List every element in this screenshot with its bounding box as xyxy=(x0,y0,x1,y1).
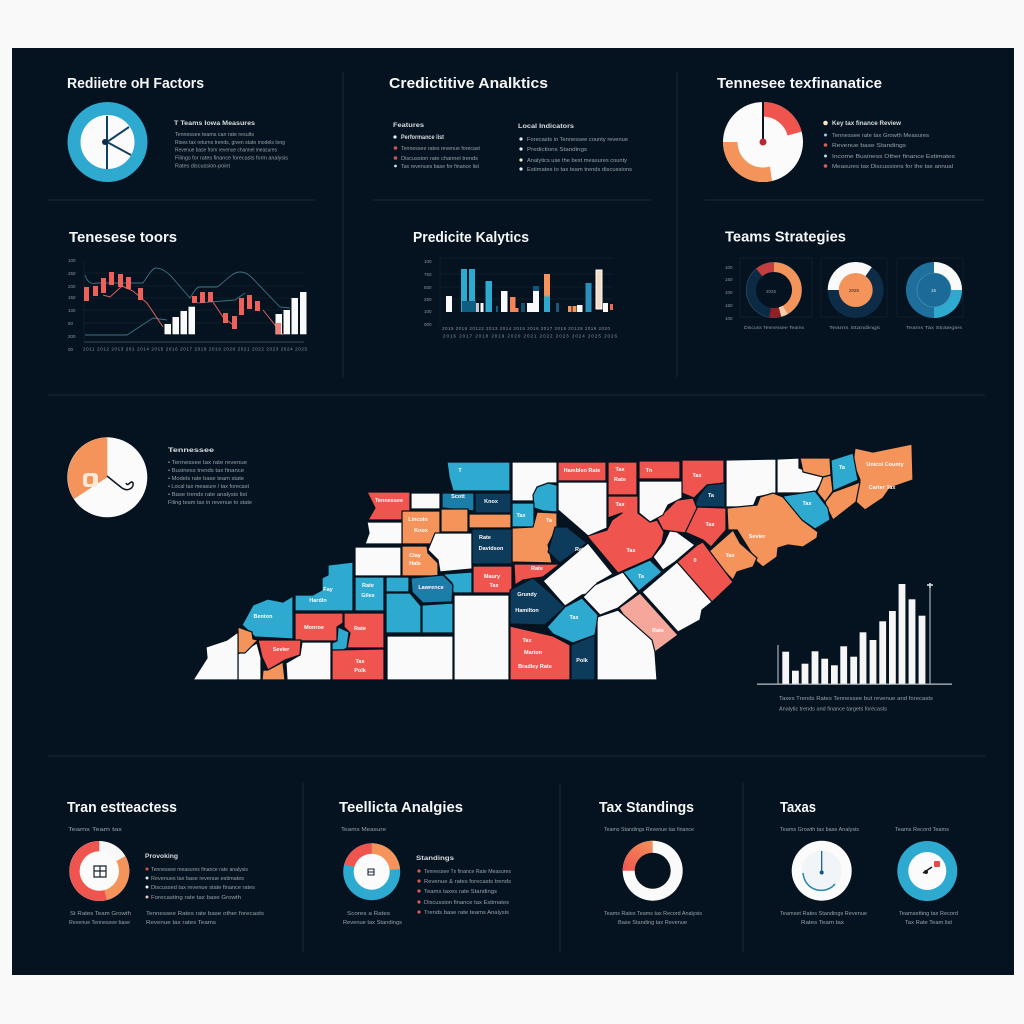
list: effectiveness: Provoking xyxy=(145,854,178,860)
legend: finance: Income Business Other finance Estimates xyxy=(832,154,955,160)
map labels: Benton xyxy=(254,614,273,620)
map labels: Tax xyxy=(725,553,735,559)
map labels: Davidson xyxy=(479,546,504,552)
chart: trend bars xyxy=(757,583,952,712)
map labels: 0 xyxy=(693,558,697,564)
heading: tax standings: Tax Standings xyxy=(599,799,694,816)
text block: summary xyxy=(168,448,252,506)
chart: donut two xyxy=(821,258,887,318)
heading: tennessee finance: Tennesee texfinanatice xyxy=(717,75,882,92)
map labels: Lincoln xyxy=(408,517,428,523)
axis labels xyxy=(725,265,733,321)
legend: finance: Key tax finance Review xyxy=(832,121,901,127)
map labels: Knox xyxy=(414,528,429,534)
chart: trend bars: Analytic trends and finance targets forecasts xyxy=(779,706,887,712)
map labels: Tax xyxy=(522,638,532,644)
chart: summary pie xyxy=(67,437,147,517)
subheadings xyxy=(780,827,949,833)
chart: candlestick and bars: 150 xyxy=(68,295,76,300)
map labels: Tax xyxy=(692,473,702,479)
axis labels: 100 xyxy=(725,316,733,321)
captions: effectiveness: Revenue tax rates Teams xyxy=(146,920,216,926)
text block: summary: • Base trends rate analysis list xyxy=(168,492,247,498)
list: features xyxy=(393,123,480,170)
map labels xyxy=(254,462,905,674)
list: analytics: Teams taxes rate Standings xyxy=(424,889,497,895)
panel: predictive analytics text xyxy=(389,75,632,173)
subheading: Teams Measure xyxy=(341,827,386,833)
text block: factors: T Teams Iowa Measures xyxy=(174,121,256,127)
map labels: Polk xyxy=(354,668,367,674)
map labels: Hardin xyxy=(309,598,327,604)
panel: tennessee finance xyxy=(717,75,955,182)
panel: tennessee summary pie xyxy=(67,437,252,517)
map labels: Knox xyxy=(484,499,499,505)
chart: candlestick and bars: 50 xyxy=(68,321,74,326)
panel: team effectiveness xyxy=(67,799,264,926)
map labels: Ta xyxy=(638,574,645,580)
heading: trends: Tenesese toors xyxy=(69,229,177,246)
map labels: Fay xyxy=(323,587,334,593)
chart: donut three xyxy=(897,258,963,318)
chart: standings donut xyxy=(623,841,683,901)
list: analytics: Trends base rate teams Analysis xyxy=(424,910,509,916)
list: features: Performance list xyxy=(401,135,444,141)
heading: team analytics: Teellicta Analgies xyxy=(339,799,463,816)
map labels: Ta xyxy=(546,518,553,524)
chart captions xyxy=(744,325,963,330)
legend: finance: Measures tax Discussions for the tax annual xyxy=(832,164,953,170)
text block: factors: Rises tax returns trends, given state models long xyxy=(175,140,285,146)
map labels: Lawrence xyxy=(418,585,444,591)
captions: analytics xyxy=(343,911,402,926)
list: features: Tax revenues base for finance list xyxy=(401,164,479,170)
chart: grouped bars: 500 xyxy=(424,285,432,290)
panel: predictive analytics chart xyxy=(413,229,617,338)
map labels: Ta xyxy=(708,493,715,499)
map labels: Tax xyxy=(569,615,579,621)
text block: factors: Tennessee teams can rate results xyxy=(175,132,254,138)
chart: donut three: 15 xyxy=(931,288,937,293)
chart: candlestick and bars: 200 xyxy=(68,334,76,339)
map labels: Unicoi County xyxy=(866,462,905,468)
chart: finance pie xyxy=(723,101,803,182)
icon: gauge xyxy=(792,841,852,901)
map labels: Hamblen Rate xyxy=(564,468,600,474)
captions: taxes: Teamset Rates Standings Revenue xyxy=(780,911,867,917)
map labels: Carter Tax xyxy=(869,485,896,491)
panel: tennessee trends chart xyxy=(68,229,307,352)
chart: effectiveness donut xyxy=(69,841,129,901)
map labels: Rate xyxy=(354,626,366,632)
text block: factors: Filings for rates finance forecasts form analysis xyxy=(175,156,288,162)
map labels: Monroe xyxy=(304,625,324,631)
subheading: Teams Standings Revenue tax finance xyxy=(604,827,694,833)
chart: grouped bars: 250 xyxy=(424,297,432,302)
chart: candlestick and bars: 200 xyxy=(68,284,76,289)
list: features: Features xyxy=(393,123,425,129)
list: features: Discussion rate channel trends xyxy=(401,156,478,162)
text block: summary: Filing team tax in revenue to state xyxy=(168,500,252,506)
list: local indicators: Predictions Standings xyxy=(527,147,587,153)
subheading: Teams Team tax xyxy=(68,827,122,833)
heading: taxes: Taxas xyxy=(780,799,816,816)
panel: taxes xyxy=(780,799,958,926)
list: local indicators: Analytics use the best measures county xyxy=(527,158,627,164)
map: tennessee counties xyxy=(193,444,913,680)
text block: factors: Rates discussion-point xyxy=(175,164,230,170)
text block: summary: • Models rate base team state xyxy=(168,476,244,482)
captions: effectiveness xyxy=(69,911,264,926)
chart: grouped bars: 2016 2017 2018 2019 2020 2021 2022 2023 2024 2025 2026 xyxy=(443,334,617,338)
axis labels: 150 xyxy=(725,277,733,282)
chart: trend bars: Taxes Trends Rates Tennessee but revenue and forecasts xyxy=(779,696,933,702)
text block: factors: Revenue base from revenue channel measures xyxy=(175,148,277,154)
map labels: Sevier xyxy=(749,534,766,540)
chart: donut one xyxy=(740,258,812,318)
chart captions: Discuss Tennessee Teams xyxy=(744,325,805,330)
map labels: Maury xyxy=(484,574,501,580)
list: local indicators: Forecasts in Tennessee county revenue xyxy=(527,137,628,143)
list: effectiveness: Revenues tax base revenue estimates xyxy=(151,876,244,882)
map labels: Tennessee xyxy=(375,498,403,504)
map labels: Rate xyxy=(479,535,491,541)
heading: team effectiveness: Tran estteactess xyxy=(67,799,177,816)
panel: team analytics xyxy=(339,799,511,926)
heading: predictive analytics: Credictitive Analktics xyxy=(389,75,548,92)
map labels: Tn xyxy=(646,468,653,474)
map labels: Rate xyxy=(652,628,664,634)
list: effectiveness: Discussed tax revenue state finance rates xyxy=(151,885,255,891)
chart captions: Teams Standings xyxy=(829,325,881,330)
text block: summary: Tennessee xyxy=(168,448,215,454)
captions: analytics: Revenue tax Standings xyxy=(343,920,402,926)
map labels: Marion xyxy=(524,650,543,656)
list: analytics: Standings xyxy=(416,856,455,862)
list: effectiveness: Forecasting rate tax base Growth xyxy=(151,895,241,901)
list: analytics xyxy=(416,856,511,916)
captions: effectiveness: St Rates Team Growth xyxy=(70,911,131,917)
chart: grouped bars: 100 xyxy=(424,309,432,314)
chart: candlestick and bars: 100 xyxy=(68,258,76,263)
map labels: Tax xyxy=(355,659,365,665)
map labels: Clay xyxy=(409,553,422,559)
heading: team strategies: Teams Strategies xyxy=(725,228,846,246)
map labels: Ta xyxy=(839,465,846,471)
legend: finance: Tennessee rate tax Growth Measures xyxy=(832,133,929,139)
list: effectiveness: Tennessee measures finance rate analysis xyxy=(151,867,248,873)
map labels: Tax xyxy=(615,467,625,473)
legend: finance xyxy=(823,121,955,170)
map labels: Rate xyxy=(614,477,626,483)
chart: donut two: 2025 xyxy=(849,288,860,293)
axis labels: 150 xyxy=(725,303,733,308)
map labels: Hamilton xyxy=(515,608,539,614)
panel: factors xyxy=(67,75,288,182)
chart: candlestick and bars: 100 xyxy=(68,308,76,313)
map labels: T xyxy=(458,468,462,474)
axis labels: 100 xyxy=(725,265,733,270)
icon: clock dial xyxy=(68,102,148,182)
captions: standings: Base Standing tax Revenue xyxy=(618,920,687,926)
captions: taxes: Tax Rate Team list xyxy=(905,920,952,926)
map labels: Bradley Rate xyxy=(518,664,552,670)
axis labels: 100 xyxy=(725,290,733,295)
map labels: Polk xyxy=(576,658,589,664)
list: local indicators: Estimates to tax team trends discussions xyxy=(527,167,632,173)
text block: summary: • Local tax measure / tax forecast xyxy=(168,484,249,490)
map labels: Tax xyxy=(802,501,812,507)
chart: grouped bars: 000 xyxy=(424,322,432,327)
map labels: Tax xyxy=(626,548,636,554)
list: analytics: Revenue & rates forecasts trends xyxy=(424,879,511,885)
map labels: Grundy xyxy=(517,592,538,598)
map labels: Scott xyxy=(451,494,465,500)
chart: candlestick and bars xyxy=(68,258,307,352)
chart: analytics donut xyxy=(343,843,400,900)
captions: taxes: Teamsetting tax Record xyxy=(899,911,958,917)
list: analytics: Tennessee Tx finance Rate Measures xyxy=(424,869,511,875)
chart: grouped bars: 100 xyxy=(424,259,432,264)
chart captions: Teams Tax Strategies xyxy=(906,325,963,330)
map labels: Rate xyxy=(531,566,543,572)
captions: standings: Teams Rates Teams tax Record Analysis xyxy=(604,911,702,917)
map labels: Sevier xyxy=(273,647,290,653)
legend: finance: Revenue base Standings xyxy=(832,143,906,149)
map labels: Tax xyxy=(516,513,526,519)
chart: candlestick and bars: 00 xyxy=(68,347,74,352)
chart: donut one: 2025 xyxy=(766,289,777,294)
captions: effectiveness: Revenue Tennessee base xyxy=(69,920,130,926)
map labels: Giles xyxy=(361,593,375,599)
map labels: Tax xyxy=(615,502,625,508)
captions: standings xyxy=(604,911,702,926)
list: features: Tennessee rates revenue forecast xyxy=(401,146,480,152)
subheadings: Teams Growth tax base Analysis xyxy=(780,827,859,833)
heading: predictive analytics chart: Predicite Kalytics xyxy=(413,229,529,246)
heading: factors: Rediietre oH Factors xyxy=(67,75,204,92)
captions: taxes: Rates Team tax xyxy=(801,920,844,926)
subheadings: Teams Record Teams xyxy=(895,827,949,833)
list: analytics: Discussion finance tax Estimates xyxy=(424,900,509,906)
chart: grouped bars xyxy=(424,258,617,338)
list: local indicators xyxy=(518,124,632,173)
panel: tax standings xyxy=(599,799,702,926)
chart: candlestick and bars: 2011 2012 2013 201 2014 2015 2016 2017 2018 2019 2020 2021 2022 2023 2024 2025 xyxy=(83,346,307,352)
captions: taxes xyxy=(780,911,958,926)
text block: factors xyxy=(174,121,288,170)
text block: summary: • Tennessee tax rate revenue xyxy=(168,460,247,466)
map labels: Hale xyxy=(409,561,421,567)
icon: teal dial with key xyxy=(897,841,957,901)
list: effectiveness xyxy=(145,854,255,901)
map labels: Rate xyxy=(362,583,374,589)
captions: analytics: Scores a Rates xyxy=(347,911,390,917)
chart: grouped bars: 750 xyxy=(424,272,432,277)
captions: effectiveness: Tennessee Rates rate base other forecasts xyxy=(146,911,264,917)
map labels: Tax xyxy=(705,522,715,528)
map labels: Rate xyxy=(575,547,587,553)
text block: summary: • Business trends tax finance xyxy=(168,468,244,474)
map labels: Tax xyxy=(489,583,499,589)
chart: candlestick and bars: 250 xyxy=(68,271,76,276)
list: local indicators: Local Indicators xyxy=(518,124,575,130)
panel: team strategies xyxy=(725,228,963,330)
chart: grouped bars: 2015 2016 20122 2013 2014 2015 2016 2017 2018 20128 2019 2020 xyxy=(442,326,610,331)
